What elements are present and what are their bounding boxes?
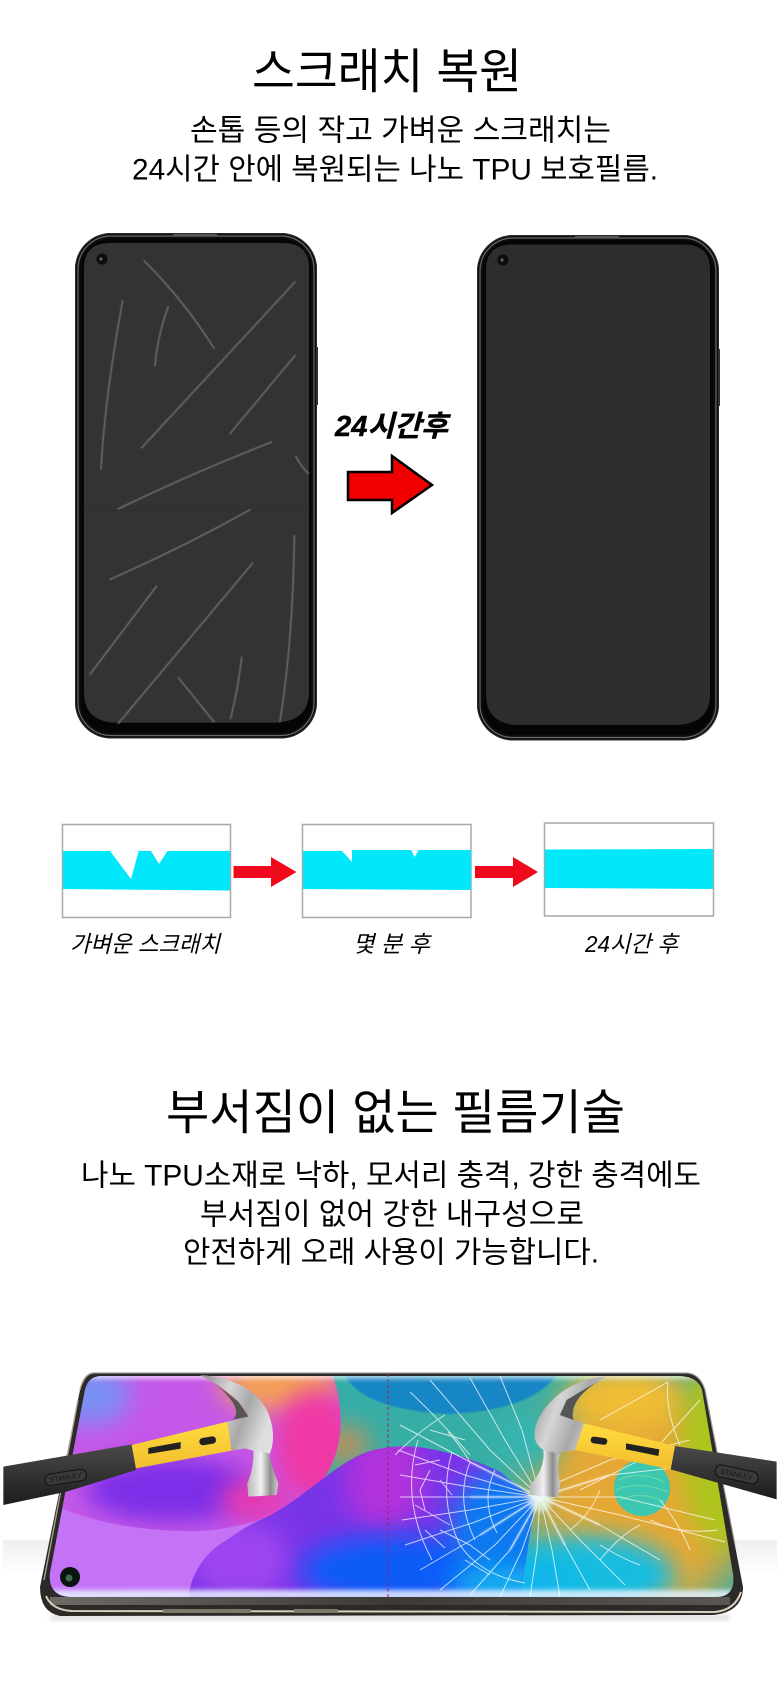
light violet lower left	[50, 1492, 264, 1597]
screen edge glow	[40, 1590, 740, 1600]
description: shatterproof film: 안전하게 오래 사용이 가능합니다.	[183, 1236, 599, 1270]
subtitle: scratch recovery description: 손톱 등의 작고 가벼운 스크래치는	[190, 114, 611, 148]
illustration: hammer impact on phone	[3, 1350, 777, 1620]
cracks in glass	[395, 1376, 725, 1597]
fingerprint sensor	[614, 1460, 670, 1516]
title: scratch recovery: 스크래치 복원	[252, 46, 522, 99]
label: after 24 hours: 24시간후	[334, 411, 451, 443]
subtitle: scratch recovery description	[132, 114, 658, 186]
phone screen wallpaper	[50, 1376, 734, 1597]
icon: front camera	[96, 254, 108, 264]
hammer: left: STANLEY	[49, 1470, 83, 1485]
subtitle: scratch recovery description: 24시간 안에 복원되는 나노 TPU 보호필름.	[132, 154, 658, 186]
description: shatterproof film: 부서짐이 없어 강한 내구성으로	[200, 1198, 584, 1232]
phone: recovered screen	[477, 235, 720, 740]
scratches	[90, 261, 308, 723]
pink blob	[62, 1376, 341, 1532]
arrow: stage one to two	[234, 857, 296, 887]
purple blue wave	[188, 1446, 535, 1597]
stage box: after 24 hours	[544, 823, 714, 916]
hammer: right	[530, 1377, 777, 1499]
hammer: left	[3, 1375, 278, 1505]
stage labels: 가벼운 스크래치	[70, 931, 222, 957]
phone body	[40, 1373, 743, 1616]
arrow: stage two to three	[475, 857, 538, 887]
divider: before and after	[387, 1374, 389, 1598]
icon: front camera	[498, 254, 508, 266]
stage labels: 24시간 후	[584, 931, 681, 957]
diagram: film self-healing stages	[62, 823, 714, 957]
stage box: after a few minutes	[302, 824, 471, 918]
right side colours	[530, 1380, 750, 1620]
description: shatterproof film: 나노 TPU소재로 낙하, 모서리 충격, 강한 충격에도	[81, 1160, 701, 1192]
stage labels: 몇 분 후	[353, 931, 433, 957]
dark blue top ellipse	[345, 1376, 556, 1414]
title: shatterproof film technology: 부서짐이 없는 필름기술	[166, 1087, 625, 1140]
icon: front camera	[60, 1567, 80, 1587]
phone: scratched screen	[75, 233, 318, 738]
stage labels	[70, 931, 681, 957]
description: shatterproof film	[81, 1160, 701, 1270]
stage box: light scratch	[62, 824, 230, 918]
arrow: red to the right	[348, 456, 432, 513]
hammer: right: STANLEY	[720, 1467, 754, 1482]
